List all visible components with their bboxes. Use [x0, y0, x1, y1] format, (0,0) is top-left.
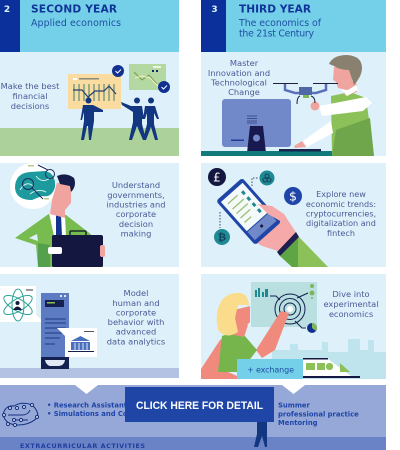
panel: third year header [201, 0, 386, 52]
text: activities left: • Simulations and Competitions [47, 410, 169, 418]
button: click here for detail: CLICK HERE FOR DETAIL [136, 400, 263, 412]
heading: extracurricular activities: EXTRACURRICULAR ACTIVITIES [20, 442, 145, 450]
icon: monitor [222, 99, 291, 153]
text: innovation: Innovation and [208, 68, 270, 78]
text: understand: decision [119, 219, 153, 229]
panel: second year header: 2 [4, 5, 10, 15]
text: understand: Understand [112, 180, 160, 190]
text: financial decisions: decisions [11, 101, 49, 111]
text: innovation: Technological [210, 78, 267, 88]
chart: target screen [251, 282, 317, 333]
text: experimental: Dive into [332, 289, 370, 299]
text: activities right: Summer [278, 402, 311, 410]
text: model: data analytics [107, 336, 165, 346]
icon: standing figure [254, 422, 267, 447]
icon: man with drone [294, 55, 374, 156]
icon: train [303, 358, 360, 378]
panel: second year header: SECOND YEAR [31, 4, 117, 16]
text: innovation: Change [228, 87, 260, 97]
panel: third year header: 3 [211, 5, 218, 15]
icon: circuit brain [2, 403, 38, 426]
icon: network coin [260, 170, 274, 186]
icon: check badge right [158, 81, 170, 93]
icon: pound coin: £ [213, 170, 221, 184]
text: economic trends: Explore new [316, 189, 366, 199]
icon: bank card [57, 328, 97, 357]
panel: understand governments [0, 163, 179, 267]
text: model: behavior with [108, 317, 164, 327]
icon: pound coin [208, 168, 226, 186]
icon: check badge top [112, 65, 124, 77]
label: exchange: + exchange [247, 366, 294, 374]
city skyline [272, 339, 386, 379]
text: activities right: professional practice [278, 410, 359, 418]
text: understand: governments, [107, 190, 165, 200]
panel: new economic trends [201, 163, 386, 267]
icon: server tower [41, 293, 69, 369]
icon: woman [201, 293, 289, 379]
text: model: human and [112, 298, 160, 308]
panel: second year header [0, 0, 179, 52]
text: financial decisions: financial [12, 91, 48, 101]
icon: hand holding phone [216, 178, 328, 267]
icon: dollar coin [284, 187, 302, 205]
panel: third year header: THIRD YEAR [239, 4, 311, 16]
icon: audience figure two [143, 98, 159, 140]
text: activities left: • Research Assistant [47, 402, 128, 410]
text: economic trends: cryptocurrencies, [306, 208, 376, 218]
text: experimental: economics [329, 309, 373, 319]
chart: line board [129, 64, 166, 90]
text: innovation: Master [230, 58, 259, 68]
text: economic trends: fintech [327, 228, 355, 238]
text: model: Model [124, 288, 148, 298]
icon: atom card [0, 286, 44, 322]
icon: bitcoin coin: ₿ [218, 232, 226, 244]
text: activities right: Mentoring [278, 419, 318, 427]
icon: presenter figure [80, 98, 103, 140]
text: model: corporate [116, 308, 156, 318]
text: experimental: experimental [323, 299, 379, 309]
panel: innovation and technological change [201, 52, 386, 156]
text: economic trends: economic trends: [306, 199, 376, 209]
panel: financial decisions [0, 52, 179, 156]
panel: third year header: The economics of [238, 18, 322, 29]
desk [201, 151, 366, 156]
text: economic trends: digitalization and [306, 218, 376, 228]
panel: extracurricular activities [0, 385, 386, 450]
icon: dollar coin: $ [289, 188, 297, 204]
panel: third year header: the 21st Century [239, 28, 314, 40]
icon: drone [273, 84, 338, 104]
text: understand: making [121, 228, 151, 238]
panel: model behavior [0, 274, 179, 378]
text: model: advanced [116, 326, 156, 336]
icon: businessman with briefcase [15, 174, 105, 267]
icon: bitcoin coin [214, 229, 230, 245]
chart: candlestick board [68, 74, 121, 109]
text: understand: corporate [116, 209, 156, 219]
text: financial decisions: Make the best [1, 81, 60, 91]
label: exchange [237, 359, 303, 379]
text: understand: industries and [106, 200, 166, 210]
icon: audience figure one [121, 98, 146, 140]
panel: second year header: Applied economics [31, 18, 121, 29]
icon: brain bubble [10, 163, 56, 209]
panel: experimental economics [201, 274, 386, 379]
button: click here for detail [125, 387, 274, 422]
